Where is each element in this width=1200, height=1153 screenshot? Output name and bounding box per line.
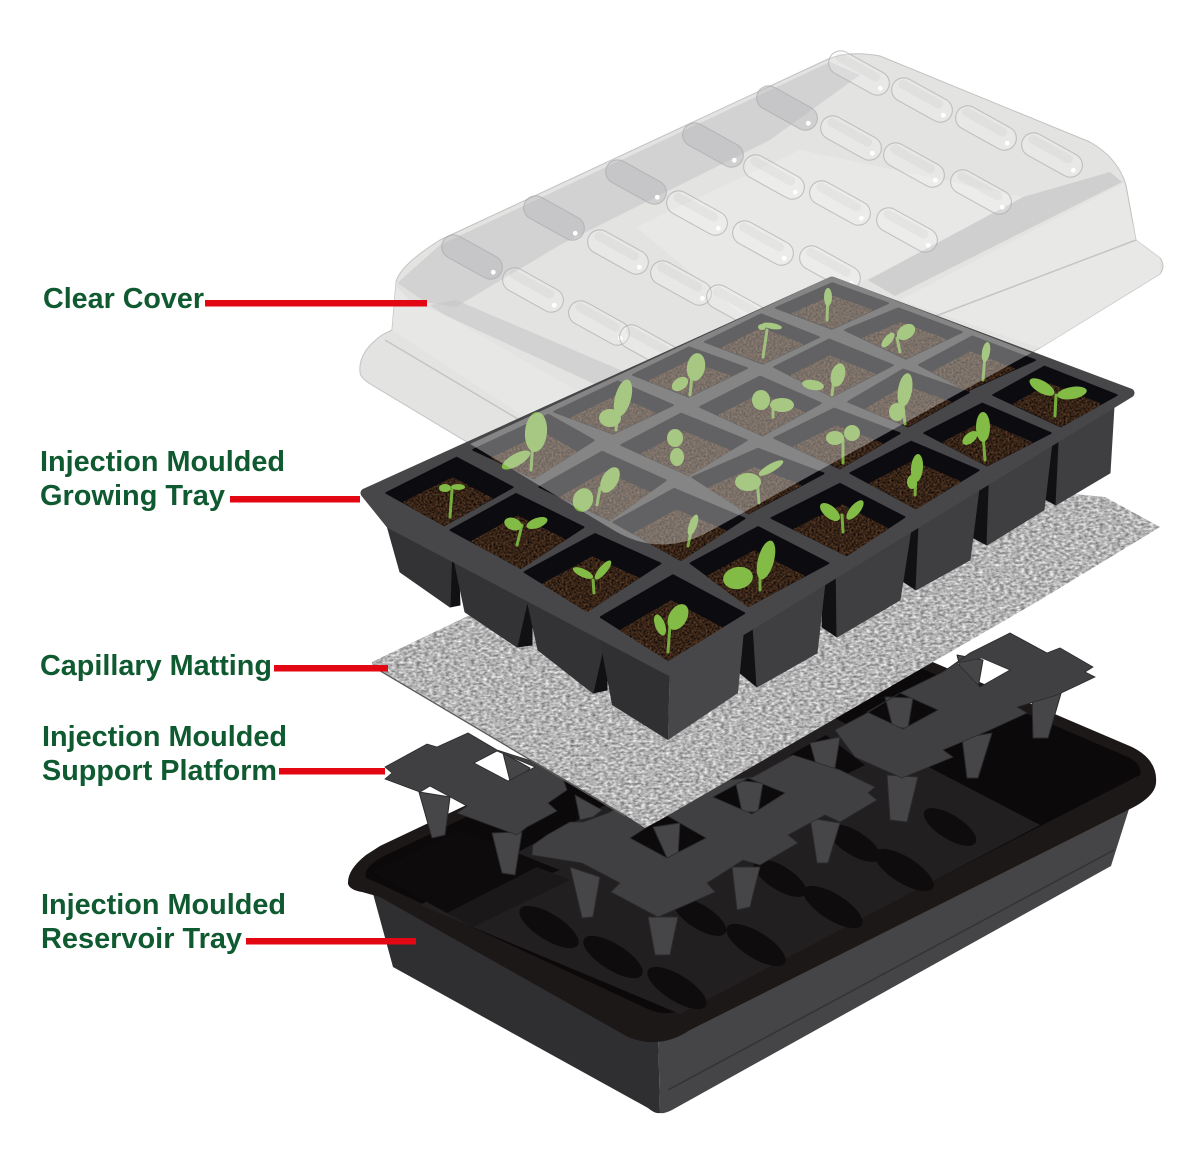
label: reservoir tray: Injection Moulded: [41, 889, 286, 921]
platform section right: [835, 633, 1095, 778]
label: clear cover: [43, 283, 427, 315]
legs seen through holes: [653, 697, 913, 858]
soil: [404, 296, 1100, 660]
support platform: [385, 633, 1095, 955]
label: clear cover: Clear Cover: [43, 283, 204, 315]
platform section front: [532, 755, 877, 917]
label: reservoir tray: Reservoir Tray: [41, 923, 242, 955]
capillary matting: [372, 493, 1160, 828]
label: capillary matting: Capillary Matting: [40, 650, 272, 682]
platform legs: [419, 655, 1062, 955]
label: support platform: [42, 721, 385, 787]
label: support platform: Injection Moulded: [42, 721, 287, 753]
clear cover: [360, 47, 1163, 545]
label: growing tray: [40, 446, 360, 512]
label: support platform: Support Platform: [42, 755, 277, 787]
tray rim: [365, 281, 1130, 672]
label: capillary matting: [40, 650, 388, 682]
platform section left: [385, 733, 567, 835]
tray cells: [386, 283, 1117, 660]
label: growing tray: Injection Moulded: [40, 446, 285, 478]
growing tray: [365, 281, 1130, 740]
hole backgrounds: [629, 693, 938, 858]
label: reservoir tray: [41, 889, 416, 955]
tray pots: [384, 390, 1115, 740]
seedlings: [439, 288, 1088, 652]
cover overlay on tray: [470, 276, 1032, 544]
label: growing tray: Growing Tray: [40, 480, 225, 512]
reservoir tray: [348, 625, 1156, 1113]
